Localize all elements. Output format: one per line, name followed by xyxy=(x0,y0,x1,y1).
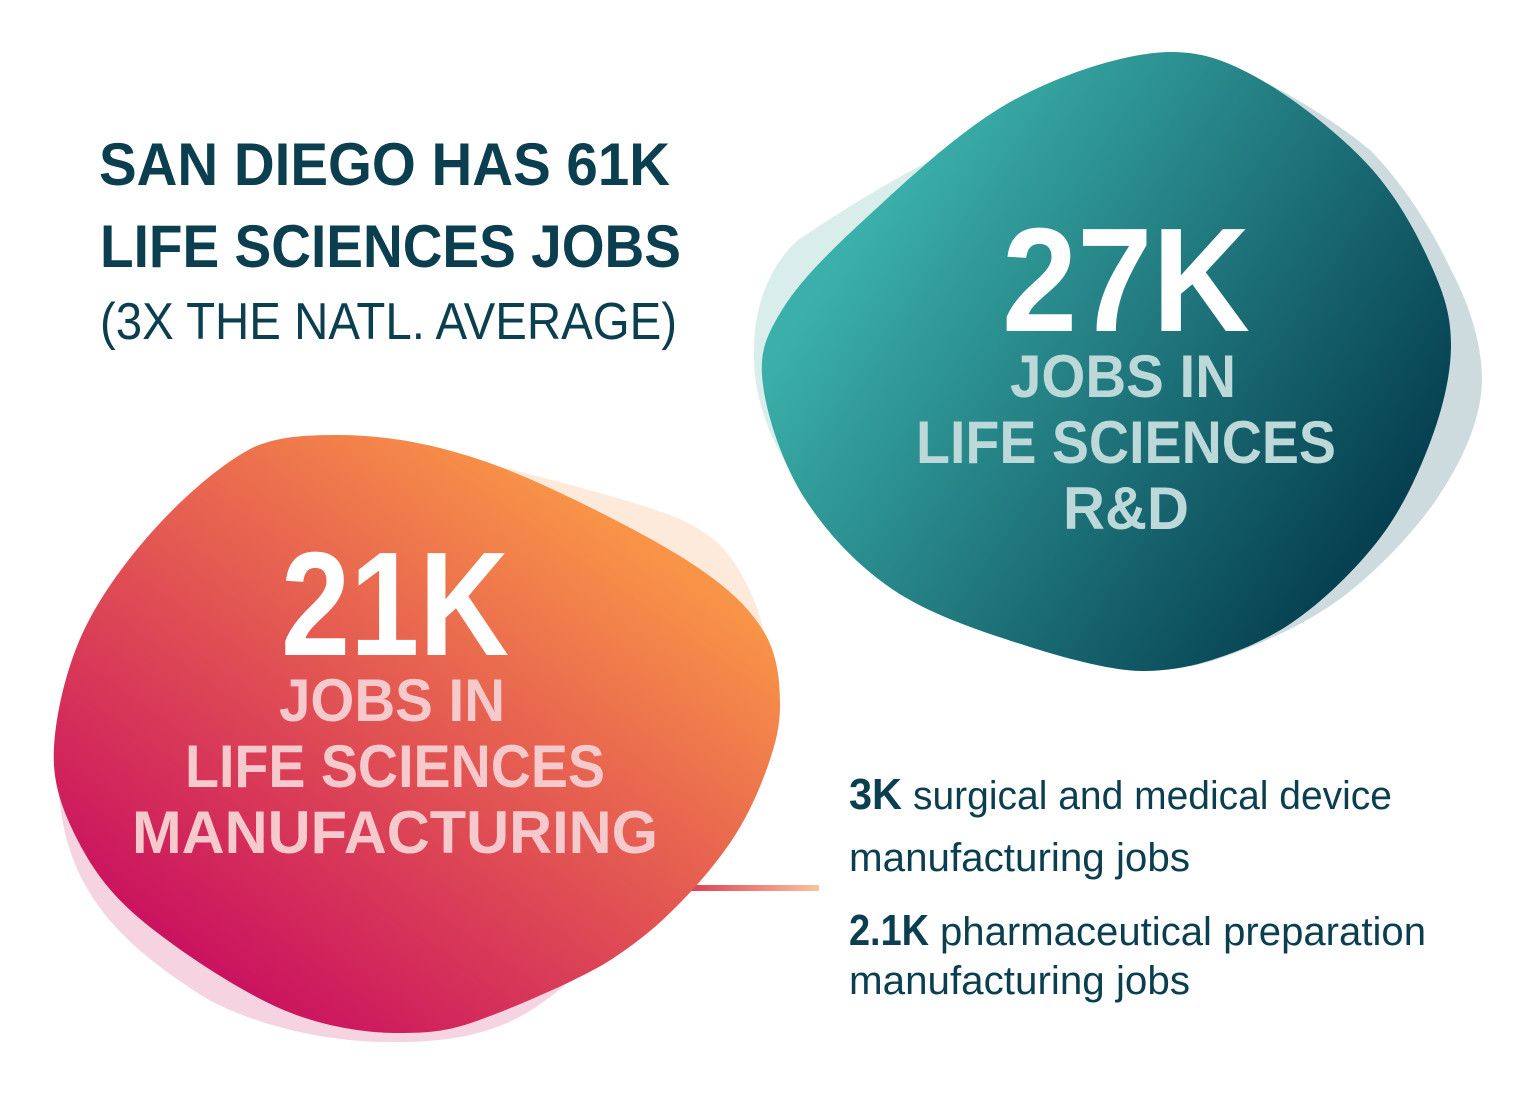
label: R&D jobs: JOBS IN xyxy=(1010,343,1236,410)
label: manufacturing jobs xyxy=(132,667,658,866)
text block: manufacturing breakdown xyxy=(849,770,1426,1003)
label: R&D jobs: LIFE SCIENCES xyxy=(916,409,1336,476)
blob shadow: peach xyxy=(503,467,764,632)
blob shadow: light teal xyxy=(754,154,944,470)
item: pharmaceutical preparation jobs: 2.1K xyxy=(849,906,929,955)
stat: 27K: 27K xyxy=(1002,198,1250,363)
panel: R&D jobs blob xyxy=(754,52,1482,671)
label: manufacturing jobs: LIFE SCIENCES xyxy=(185,733,605,800)
blob: teal xyxy=(762,52,1451,671)
item: pharmaceutical preparation jobs: pharmaceutical preparation xyxy=(940,910,1426,954)
item: surgical and medical device jobs: 3K xyxy=(849,770,902,819)
title: (3X THE NATL. AVERAGE) xyxy=(100,293,677,351)
panel: manufacturing jobs blob xyxy=(54,435,819,1042)
blob shadow: grey blue xyxy=(1191,81,1482,666)
blob: orange xyxy=(54,435,780,1033)
item: surgical and medical device jobs: manufacturing jobs xyxy=(849,836,1190,880)
title xyxy=(99,131,681,351)
stat: 21K: 21K xyxy=(281,522,509,687)
title: LIFE SCIENCES JOBS xyxy=(100,213,681,280)
label: R&D jobs: R&D xyxy=(1063,475,1189,542)
label: R&D jobs xyxy=(916,343,1336,542)
item: pharmaceutical preparation jobs xyxy=(849,906,1426,1003)
label: manufacturing jobs: JOBS IN xyxy=(279,667,505,734)
connector line xyxy=(690,885,819,891)
item: surgical and medical device jobs: surgical and medical device xyxy=(913,774,1392,818)
item: pharmaceutical preparation jobs: manufacturing jobs xyxy=(849,959,1190,1003)
title: SAN DIEGO HAS 61K xyxy=(99,131,670,198)
label: manufacturing jobs: MANUFACTURING xyxy=(132,799,658,866)
blob shadow: pink xyxy=(59,795,582,1042)
item: surgical and medical device jobs xyxy=(849,770,1392,880)
